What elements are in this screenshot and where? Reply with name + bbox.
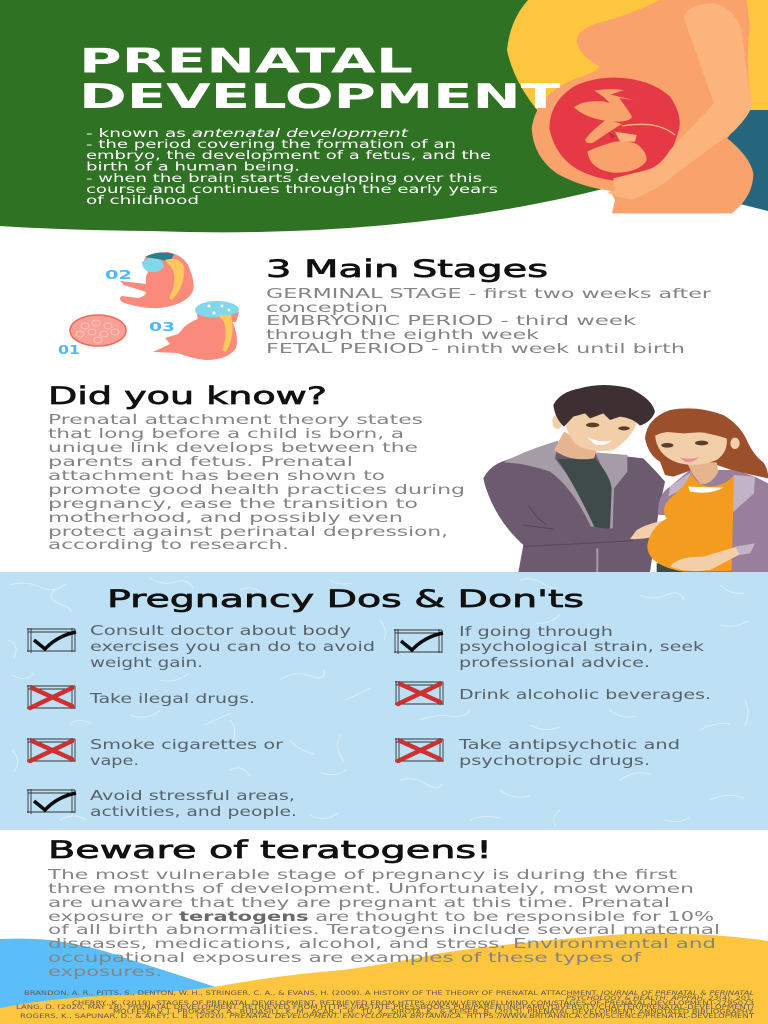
stages text: conception xyxy=(266,300,388,316)
references: PSYCHOLOGY & HEALTH: APPPAH, 23 (4), 201. xyxy=(566,995,754,1002)
item: avoid stress (do): activities, and people. xyxy=(90,804,297,820)
item: illegal drugs (don't): Take ilegal drugs. xyxy=(89,691,255,707)
teratogens paragraph: three months of development. Unfortunately, most women xyxy=(48,881,694,897)
teratogens paragraph: are unaware that they are pregnant at this time. Prenatal xyxy=(48,895,670,911)
references: CHERRY, K. (2019). STAGES OF PRENATAL DEVELOPMENT. RETRIEVED FROM HTTPS://WWW.VERYWELLMIND.COM/STAGES-OF-PRENATAL-DEVELOPMENT-2795073 xyxy=(72,1000,754,1007)
item: psychotropic drugs (don't): psychotropic drugs. xyxy=(459,753,650,769)
intro text: course and continues through the early years xyxy=(86,182,498,196)
stages text: through the eighth week xyxy=(266,327,539,343)
did you know paragraph: Prenatal attachment theory states xyxy=(48,412,423,428)
item: alcohol (don't): Drink alcoholic beverages. xyxy=(459,687,711,703)
item: professional advice (do) xyxy=(394,624,704,671)
item: alcohol (don't) xyxy=(395,681,711,706)
stages text: EMBRYONIC PERIOD - third week xyxy=(266,313,636,329)
header banner xyxy=(0,0,768,232)
item: avoid stress (do) xyxy=(27,788,297,820)
intro text: embryo, the development of a fetus, and the xyxy=(86,148,491,162)
fetus xyxy=(574,89,675,173)
references: BRANDON, A. R., PITTS, S., DENTON, W. H., STRINGER, C. A., & EVANS, H. (2009). A HISTORY OF THE THEORY OF PRENATAL ATTACHMENT. JOURNAL OF PRENATAL & PERINATAL xyxy=(24,990,755,997)
stages text: GERMINAL STAGE - first two weeks after xyxy=(266,286,712,302)
did you know paragraph: protect against perinatal depression, xyxy=(48,524,448,540)
title: DEVELOPMENT xyxy=(79,77,561,117)
did you know paragraph: promote good health practices during xyxy=(48,482,465,498)
title: PRENATAL xyxy=(79,42,413,82)
panel: pregnancy dos and don'ts xyxy=(0,572,768,830)
intro text: birth of a human being. xyxy=(86,160,300,174)
did you know paragraph: attachment has been shown to xyxy=(48,468,385,484)
did you know paragraph: according to research. xyxy=(48,537,289,553)
item: smoking (don't): vape. xyxy=(90,753,139,769)
stages text xyxy=(266,286,712,357)
intro text: - the period covering the formation of an xyxy=(86,137,456,151)
illustration: pregnant woman with fetus xyxy=(532,0,753,213)
teratogens paragraph: of all birth abnormalities. Teratogens include several maternal xyxy=(48,922,720,938)
stage 02 embryo: 02 xyxy=(105,268,132,282)
teratogens paragraph xyxy=(46,867,720,980)
references: LANG, D. (2020, MAY 18). PRENATAL DEVELOPMENT. RETRIEVED FROM HTTPS://IASTATE.PRESSBOOKS.PUB/PARENTINGFAMILYDIVERSITY/CHAPTER/PRENATAL-DEVELOPMENT/ xyxy=(16,1004,755,1011)
intro text: - when the brain starts developing over this xyxy=(86,171,482,185)
heading: pregnancy dos and don'ts: Pregnancy Dos & Don'ts xyxy=(107,585,584,613)
references: MOLFESE, V. J., PROKASKY, A., RUDASILL, K. M., ACAR, I. H., TU, X., SIROTA, K., & KEISER, B. (2013). PRENATAL DEVELOPMENT: ANNOTATED BIBLIOGRAPHY. xyxy=(113,1008,754,1016)
did you know paragraph: parents and fetus. Prenatal xyxy=(48,454,353,470)
stage 03 fetus xyxy=(149,301,239,360)
item: professional advice (do): psychological strain, seek xyxy=(459,639,704,655)
stages text: FETAL PERIOD - ninth week until birth xyxy=(266,341,685,357)
item: psychotropic drugs (don't): Take antipsychotic and xyxy=(458,737,680,753)
man xyxy=(483,385,687,572)
item: consult doctor (do): Consult doctor about body xyxy=(90,623,351,639)
references: ROGERS, K., SAPUNAR, D., & AREY, L. B., (2020). PRENATAL DEVELOPMENT. ENCYCLOPEDIA BRITANNICA. HTTPS://WWW.BRITANNICA.COM/SCIENCE/PRENATAL-DEVELOPMENT xyxy=(20,1013,754,1020)
footer waves xyxy=(0,933,768,1024)
item: psychotropic drugs (don't) xyxy=(395,737,680,769)
item: smoking (don't): Smoke cigarettes or xyxy=(90,737,284,753)
item: consult doctor (do): exercises you can do to avoid xyxy=(90,639,375,655)
title xyxy=(79,42,561,117)
teratogens paragraph: The most vulnerable stage of pregnancy is during the first xyxy=(46,867,677,883)
did you know paragraph xyxy=(48,412,465,553)
teratogens paragraph: occupational exposures are examples of these types of xyxy=(48,950,643,966)
icon: three embryo stages xyxy=(58,252,239,360)
stage 01 egg: 01 xyxy=(58,343,80,357)
item: consult doctor (do) xyxy=(27,623,375,671)
woman xyxy=(645,408,768,572)
heading: 3 Main Stages: 3 Main Stages xyxy=(266,255,548,283)
teratogens paragraph: diseases, medications, alcohol, and stress. Environmental and xyxy=(48,936,716,952)
item: consult doctor (do): weight gain. xyxy=(90,655,203,671)
did you know paragraph: pregnancy, ease the transition to xyxy=(48,496,418,512)
references xyxy=(16,990,755,1020)
stage 01 egg xyxy=(58,315,126,357)
did you know paragraph: that long before a child is born, a xyxy=(48,426,404,442)
stage 02 embryo xyxy=(105,252,194,308)
item: professional advice (do): professional advice. xyxy=(459,655,650,671)
heading: beware of teratogens: Beware of teratogens! xyxy=(48,836,492,864)
intro text: - known as antenatal development xyxy=(86,126,409,140)
item: avoid stress (do): Avoid stressful areas, xyxy=(90,788,295,804)
stage 03 fetus: 03 xyxy=(149,320,175,334)
intro text: of childhood xyxy=(86,193,199,207)
intro text xyxy=(86,126,498,207)
illustration: expecting couple xyxy=(483,385,768,572)
did you know paragraph: unique link develops between the xyxy=(48,440,418,456)
heading: did you know: Did you know? xyxy=(48,382,327,410)
teratogens paragraph: exposure or teratogens are thought to be responsible for 10% xyxy=(48,909,714,925)
item: illegal drugs (don't) xyxy=(27,685,255,710)
teratogens paragraph: exposures. xyxy=(48,964,162,980)
item: smoking (don't) xyxy=(27,737,284,769)
item: professional advice (do): If going through xyxy=(459,624,613,640)
did you know paragraph: motherhood, and possibly even xyxy=(48,510,403,526)
